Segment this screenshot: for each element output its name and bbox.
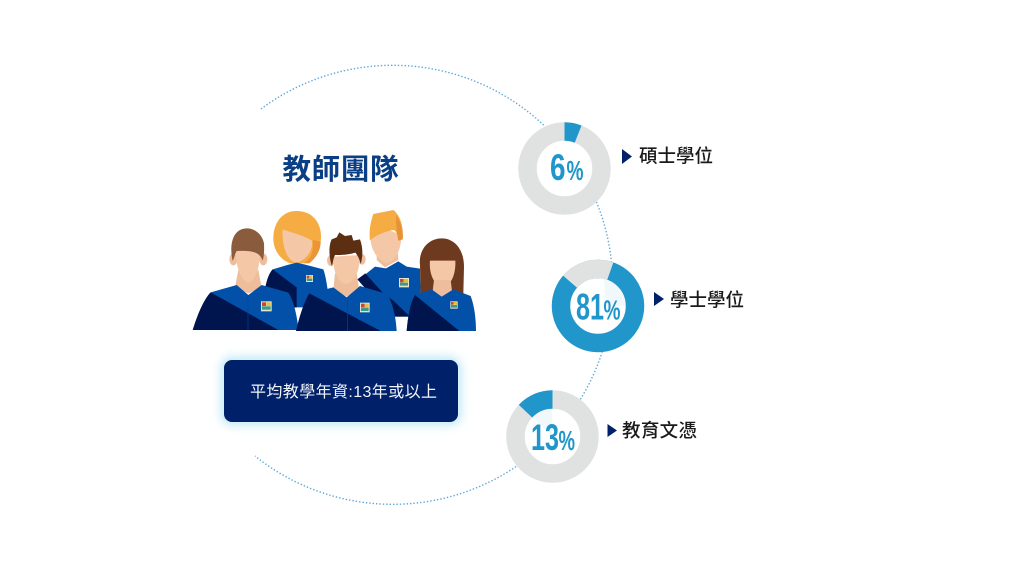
donut: bachelor's degree 81%: 81 bbox=[576, 286, 604, 328]
dotted circle connector bbox=[255, 65, 613, 504]
donut: education diploma 13% bbox=[500, 384, 605, 489]
teacher: centre bbox=[296, 232, 397, 331]
donut: master's degree 6%: 6 bbox=[550, 147, 566, 188]
donut: master's degree 6% bbox=[518, 122, 611, 215]
teacher group illustration bbox=[193, 210, 476, 331]
teacher: front left bbox=[193, 228, 299, 330]
teacher: front right bbox=[407, 238, 476, 331]
donut: bachelor's degree 81% bbox=[546, 254, 650, 358]
donut: master's degree 6%: % bbox=[566, 155, 584, 186]
callout: average teaching years: 平均教學年資:13年或以上 bbox=[250, 383, 437, 401]
teacher: back right bbox=[357, 210, 421, 317]
label: master's degree: 碩士學位 bbox=[639, 146, 713, 166]
label: bachelor's degree: 學士學位 bbox=[670, 290, 744, 310]
donut: bachelor's degree 81%: % bbox=[604, 294, 621, 326]
label: education diploma: 教育文憑 bbox=[622, 420, 697, 441]
donut: education diploma 13%: 13 bbox=[531, 417, 559, 458]
teacher: back left bbox=[265, 211, 329, 307]
title: 教師團隊 bbox=[282, 154, 399, 186]
callout: average teaching years bbox=[221, 357, 461, 425]
donut: education diploma 13%: % bbox=[558, 425, 575, 456]
